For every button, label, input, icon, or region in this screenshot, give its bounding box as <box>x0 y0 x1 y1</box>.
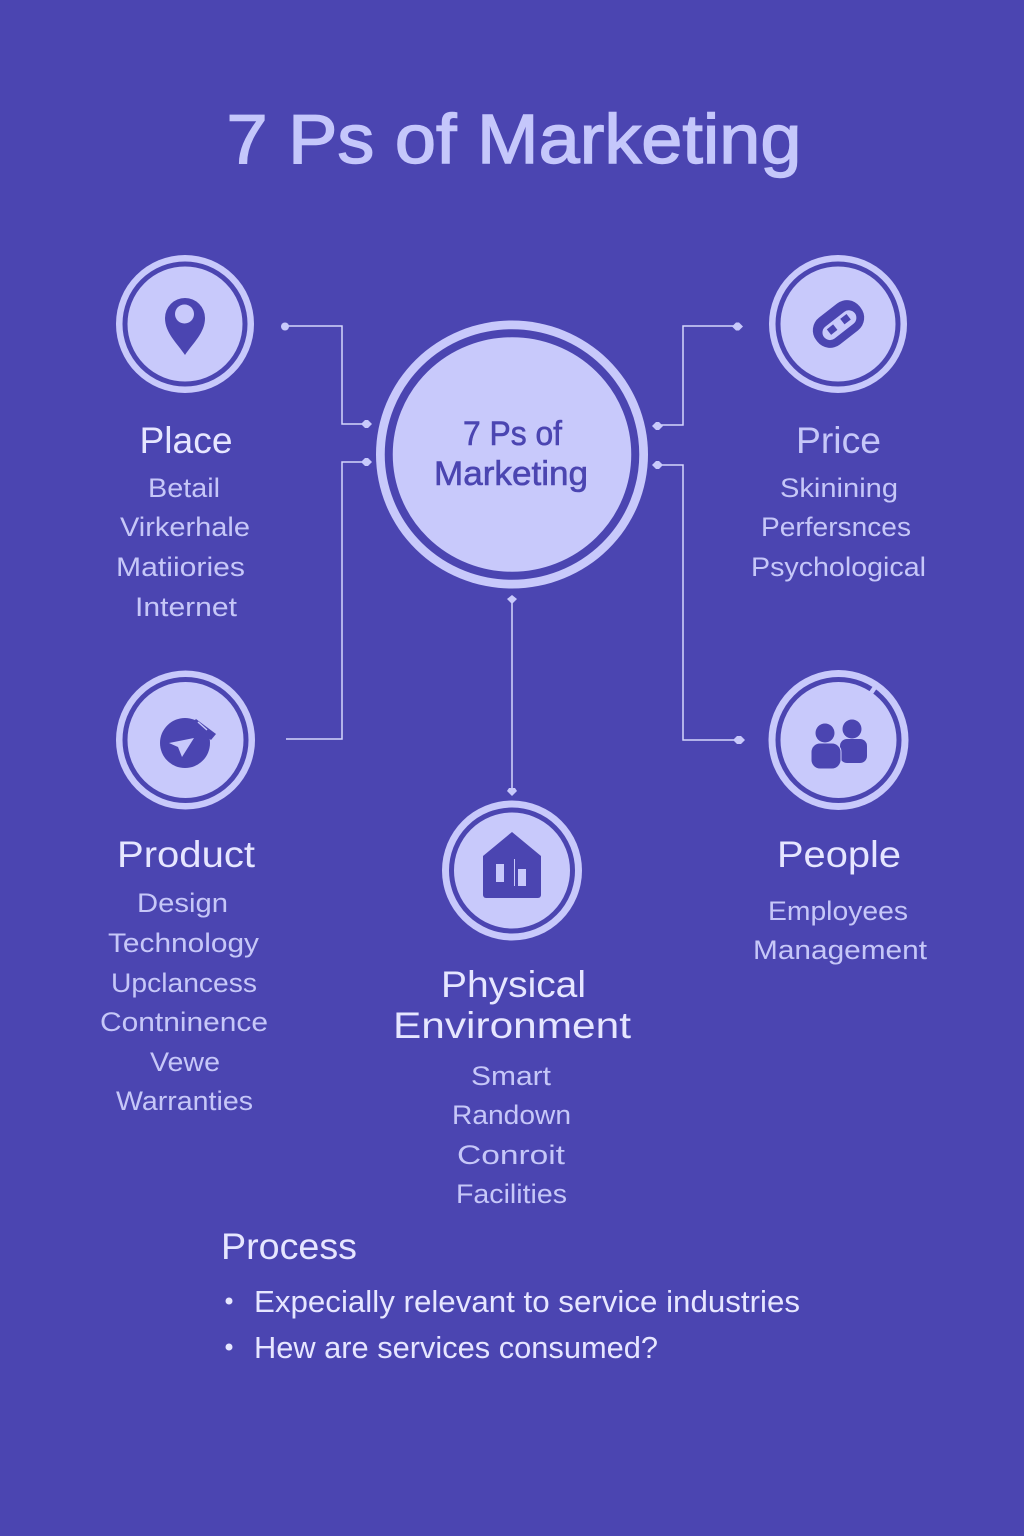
list: Conroit <box>457 1140 566 1170</box>
heading: People <box>777 834 901 875</box>
list: Facilities <box>456 1179 567 1209</box>
icon: building <box>442 800 582 940</box>
list <box>452 1061 571 1209</box>
panel: price <box>751 255 926 582</box>
heading: Product <box>117 834 256 875</box>
arrow: centre to people <box>652 461 745 744</box>
list: Virkerhale <box>120 512 250 542</box>
panel: place <box>116 255 254 622</box>
bullet list: Hew are services consumed? <box>254 1330 658 1365</box>
list <box>100 888 268 1116</box>
bullet list <box>226 1284 800 1365</box>
bullet list: Expecially relevant to service industries <box>254 1284 800 1319</box>
list: Betail <box>148 473 220 503</box>
heading: Physical <box>441 964 586 1005</box>
list: Randown <box>452 1100 571 1130</box>
heading: Price <box>796 420 881 461</box>
list: Internet <box>135 592 238 622</box>
heading: Process <box>221 1226 357 1267</box>
list: Contninence <box>100 1007 268 1037</box>
arrow: product to centre <box>286 458 372 739</box>
list: Upclancess <box>111 968 257 998</box>
list: Design <box>137 888 228 918</box>
list <box>753 896 928 965</box>
list: Psychological <box>751 552 926 582</box>
list: Smart <box>471 1061 552 1091</box>
list: Skinining <box>780 473 898 503</box>
title: 7 Ps of Marketing <box>226 100 802 178</box>
icon: compass <box>116 670 255 810</box>
icon: two people <box>768 670 908 810</box>
icon: price tag pill <box>769 255 907 393</box>
panel: product <box>100 670 268 1116</box>
list: Employees <box>768 896 908 926</box>
arrow: price to centre <box>652 322 743 430</box>
central hub <box>376 320 648 588</box>
list <box>751 473 926 582</box>
hub label second line: Marketing <box>434 455 588 493</box>
list: Warranties <box>116 1086 253 1116</box>
list: Vewe <box>150 1047 220 1077</box>
panel: people <box>753 670 928 965</box>
heading: Place <box>140 420 232 461</box>
panel: process <box>221 1226 800 1365</box>
arrow: place to centre <box>281 322 372 428</box>
hub label: 7 Ps of <box>463 415 563 453</box>
arrow: centre to physical environment <box>507 595 517 796</box>
list <box>116 473 250 622</box>
heading second line: Environment <box>393 1005 632 1046</box>
panel: physical environment <box>393 800 632 1209</box>
list: Technology <box>108 928 260 958</box>
list: Matiiories <box>116 552 245 582</box>
list: Perfersnces <box>761 512 911 542</box>
icon: map pin <box>116 255 254 393</box>
list: Management <box>753 935 928 965</box>
